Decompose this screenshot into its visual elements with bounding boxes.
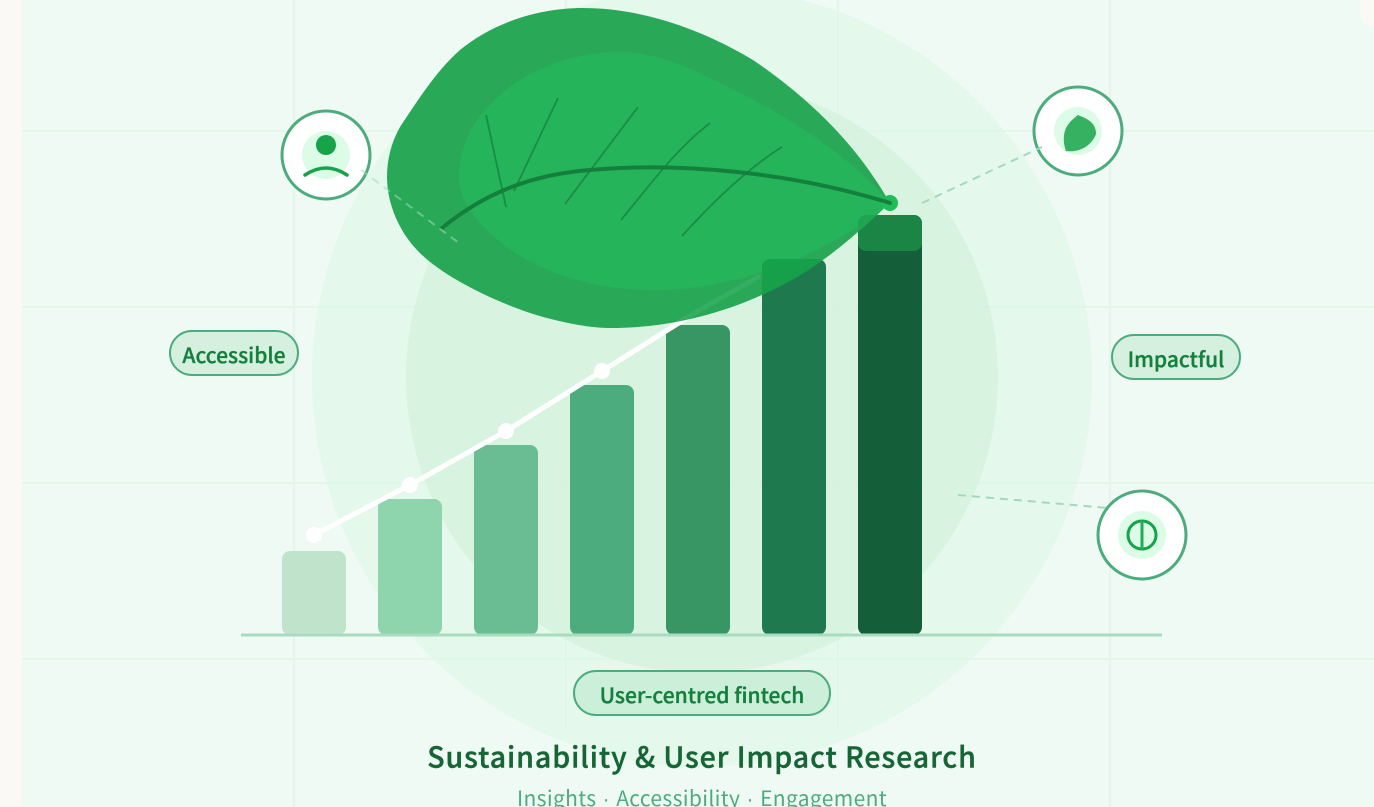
label: Impactful: Impactful: [1128, 344, 1224, 374]
connector: leaf icon: [922, 147, 1042, 203]
connector: balance icon: [958, 495, 1108, 508]
leaf tip dot: [882, 195, 898, 211]
connector: user icon to leaf: [361, 170, 459, 243]
leaf inner body: [459, 52, 890, 290]
label: User-centred fintech: User-centred fintech: [600, 680, 804, 710]
label: User-centred fintech: [574, 671, 830, 715]
leaf midrib: [442, 167, 890, 228]
title: Sustainability & User Impact Research: [427, 736, 977, 776]
leaf outer body: [387, 8, 890, 328]
icon: balance circle: [1098, 491, 1186, 579]
bars seen through the leaf: [675, 215, 876, 322]
concentric background circles: [312, 0, 1092, 767]
leaf side veins: [486, 98, 782, 236]
label: Impactful: [1112, 335, 1240, 379]
growth trend line: [306, 203, 890, 543]
label: Accessible: [170, 331, 298, 375]
label: Accessible: Accessible: [182, 340, 286, 370]
leaf illustration: [387, 8, 922, 345]
icon: user: [282, 111, 370, 199]
bar chart: [282, 215, 922, 635]
chart baseline: [241, 634, 1162, 636]
icon: leaf: [1034, 87, 1122, 175]
